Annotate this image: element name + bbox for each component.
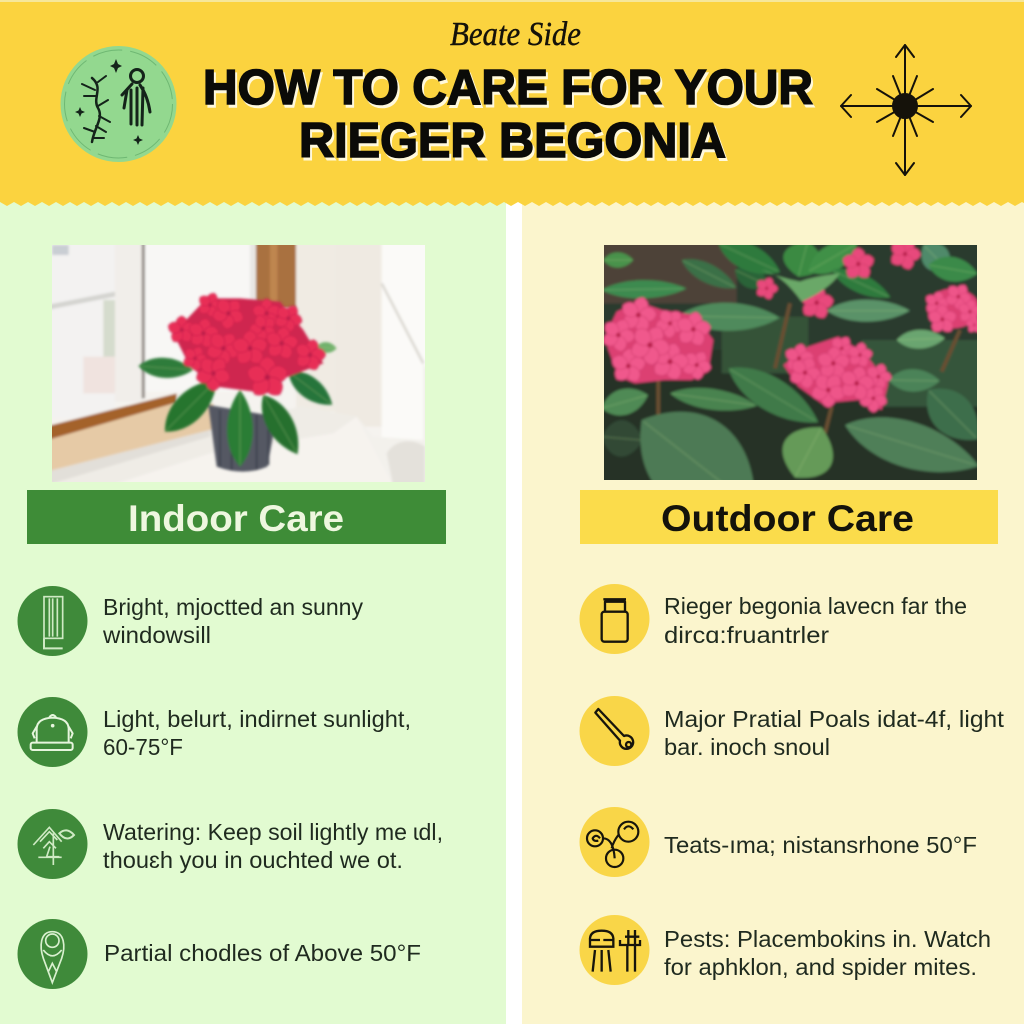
icon: bell (18, 697, 88, 767)
subtitle: Beate Side (450, 16, 581, 53)
icon: compass star (841, 45, 971, 175)
title: HOW TO CARE FOR YOUR (203, 61, 813, 115)
text: indoor tip 1: Bright, mjoctted an sunny (103, 594, 363, 620)
banner: Outdoor Care: Outdoor Care (661, 498, 914, 539)
title (203, 61, 813, 168)
icon: tree and droplet (18, 809, 88, 879)
text: outdoor tip 1: Rieger begonia lavecn far the (664, 593, 967, 619)
text: outdoor tip 1: dircɑ:fruantrler (664, 622, 829, 648)
text: indoor tip 1 (102, 594, 363, 648)
text: outdoor tip 4: for aphklon, and spider mites. (664, 954, 977, 980)
icon: jar (580, 584, 650, 654)
banner: Indoor Care (27, 490, 446, 544)
icon: window (18, 586, 88, 656)
icon: green plant and person badge (60, 46, 176, 162)
banner: Indoor Care: Indoor Care (128, 498, 344, 539)
text: indoor tip 4: Partial chodles of Above 50°F (104, 940, 421, 966)
text: indoor tip 2 (103, 706, 411, 760)
icon: pointed bud (18, 919, 88, 989)
text: outdoor tip 4: Pests: Placembokins in. Watch (664, 926, 991, 952)
icon: pest and fork (580, 915, 650, 985)
text: outdoor tip 3: Teats-ıma; nistansrhone 50°F (664, 832, 977, 858)
text: indoor tip 3: Watering: Keep soil lightly me ɩdl, (103, 819, 443, 845)
title: RIEGER BEGONIA (299, 114, 726, 168)
text: indoor tip 3: thouɛh you in ouchted we ot. (103, 847, 403, 873)
text: outdoor tip 2: bar. inoch snoul (664, 734, 830, 760)
text: indoor tip 1: windowsill (102, 622, 211, 648)
text: indoor tip 3 (103, 819, 443, 873)
text: outdoor tip 2: Major Pratial Poals idat-4f, light (664, 706, 1005, 732)
banner: Outdoor Care (580, 490, 998, 544)
header band (0, 0, 1024, 206)
photo: indoor begonia on windowsill (47, 240, 430, 487)
text: outdoor tip 4 (664, 926, 991, 980)
text: indoor tip 2: Light, belurt, indirnet sunlight, (103, 706, 411, 732)
icon: swirls (580, 807, 650, 877)
icon: thermometer (580, 696, 650, 766)
text: outdoor tip 2 (664, 706, 1005, 760)
panel: indoor background (0, 200, 506, 1024)
photo: outdoor begonias among leaves (604, 245, 977, 480)
text: outdoor tip 1 (664, 593, 967, 648)
panel: outdoor background (522, 200, 1024, 1024)
text: indoor tip 2: 60-75°F (103, 734, 183, 760)
